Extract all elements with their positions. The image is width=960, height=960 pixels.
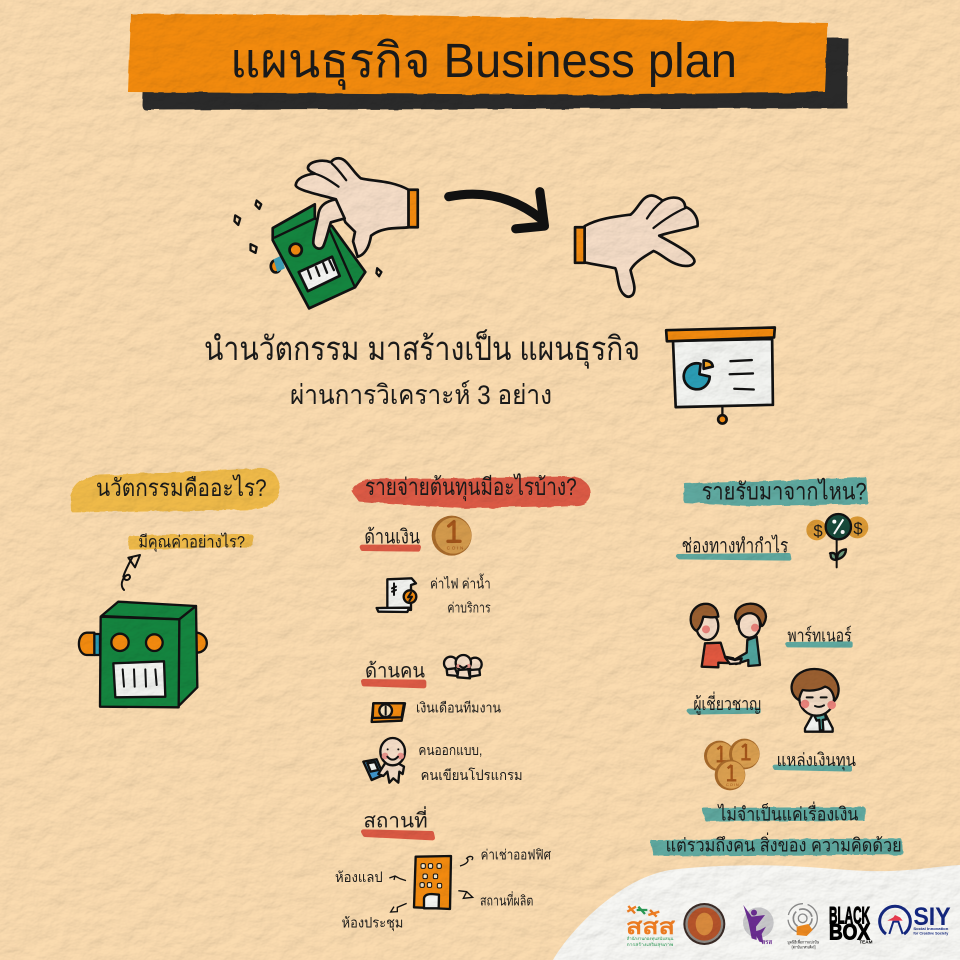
text: production site: สถานที่ผลิต: [480, 892, 533, 909]
icon: innovation robot box: [234, 200, 381, 308]
heading: expenses: [354, 473, 588, 506]
text: team salary: เงินเดือนทีมงาน: [416, 699, 501, 715]
logo: purple figures: สรส: [762, 939, 773, 946]
footer white curve: [553, 865, 960, 960]
text: designer: คนออกแบบ,: [418, 742, 482, 758]
icon: coin: [432, 516, 472, 556]
icon: bill: [377, 578, 416, 612]
small arrows: [389, 857, 473, 912]
illustration: hand takes innovation and turns it into a plan: [234, 158, 775, 424]
title banner: [128, 14, 848, 110]
icon: coin: COIN: [447, 545, 463, 550]
heading: revenue: รายรับมาจากไหน?: [702, 477, 867, 505]
panel: expenses: [354, 473, 588, 783]
icon: robot: [79, 602, 207, 707]
arrow: [449, 192, 544, 229]
logo: spiral foundation: (สถาบันอาศรมศิลป์): [792, 944, 816, 949]
subtitle line 1: นำนวัตกรรม มาสร้างเป็น แผนธุรกิจ: [204, 329, 640, 369]
note: not only money: ไม่จำเป็นแค่เรื่องเงิน: [717, 802, 859, 825]
logo: spiral foundation: [787, 904, 819, 949]
heading: what is innovation: นวัตกรรมคืออะไร?: [96, 474, 267, 502]
panel: innovation: [73, 471, 277, 707]
coin two: [729, 739, 760, 769]
text: programmer: คนเขียนโปรแกรม: [421, 767, 523, 783]
icon: two people shaking hands: [691, 604, 766, 667]
heading: what is innovation: [73, 471, 277, 510]
logo: ThaiHealth: สสส: [626, 914, 676, 939]
icon: banknotes: [372, 703, 405, 722]
logo: SIY: for Creative Society: [913, 931, 949, 936]
text: office rent: ค่าเช่าออฟฟิศ: [481, 846, 551, 862]
question: how valuable: มีคุณค่าอย่างไร?: [138, 532, 245, 552]
icon: profit plant: $: [853, 519, 863, 538]
logo: SIY: SIY: [913, 904, 951, 931]
heading: expenses: รายจ่ายต้นทุนมีอะไรบ้าง?: [365, 473, 577, 502]
logo: purple figures: [743, 905, 774, 946]
text: electricity water: ค่าไฟ ค่าน้ำ: [430, 573, 491, 591]
title banner: แผนธุรกิจ Business plan: [230, 35, 737, 90]
coin three: COIN: [726, 782, 739, 787]
logo: Black Box: [829, 902, 873, 944]
icon: profit plant: $: [813, 522, 823, 541]
text: lab room: ห้องแลป: [335, 869, 383, 885]
icon: three people: [444, 655, 482, 678]
logo: SIY: Social Innovation: [913, 926, 949, 931]
logo: Black Box: BLACK: [829, 902, 870, 929]
coin one: [704, 741, 735, 771]
label: expert: ผู้เชี่ยวชาญ: [693, 691, 761, 715]
subheading: place: [363, 807, 433, 838]
subheading: money: ด้านเงิน: [364, 526, 420, 548]
logo: round seal: [683, 903, 725, 945]
icon: left hand with cuff: [296, 158, 418, 257]
icon: thumb over box: [313, 199, 345, 249]
logo: ThaiHealth: การสร้างเสริมสุขภาพ: [627, 942, 674, 948]
label: funding source: แหล่งเงินทุน: [777, 750, 856, 771]
subheading: place: สถานที่: [363, 807, 428, 833]
note: people things ideas: แต่รวมถึงคน สิ่งของ ความคิดด้วย: [666, 833, 902, 856]
icon: profit plant: [806, 514, 868, 567]
subtitle line 2: ผ่านการวิเคราะห์ 3 อย่าง: [290, 379, 552, 410]
icon: expert portrait: [792, 669, 839, 732]
logo: Black Box: BOX: [829, 919, 870, 944]
curly arrow: [122, 555, 140, 590]
label: partner: พาร์ทเนอร์: [787, 626, 852, 646]
logo: SIY: [880, 904, 951, 936]
panel: revenue: [678, 477, 868, 732]
icon: three coins: [704, 739, 760, 790]
text: service fee: ค่าบริการ: [447, 600, 491, 616]
icon: right open hand with cuff: [575, 195, 698, 297]
subheading: people: ด้านคน: [365, 660, 425, 682]
icon: person with laptop: [363, 738, 405, 783]
label: expert: [689, 691, 761, 715]
panel: place: [335, 807, 551, 931]
subheading: profit channel: ช่องทางทำกำไร: [682, 535, 789, 558]
icon: building: [414, 856, 451, 909]
panel: funding and note: [626, 739, 951, 949]
text: meeting room: ห้องประชุม: [342, 914, 403, 931]
icon: presentation board with pie chart: [666, 328, 775, 424]
logo: spiral foundation: มูลนิธิเพื่อการแบ่งปัน: [787, 938, 819, 945]
logo: Black Box: TEAM: [859, 939, 873, 944]
logo: ThaiHealth: [626, 906, 676, 948]
logo: ThaiHealth: สำนักงานกองทุนสนับสนุน: [627, 936, 673, 942]
